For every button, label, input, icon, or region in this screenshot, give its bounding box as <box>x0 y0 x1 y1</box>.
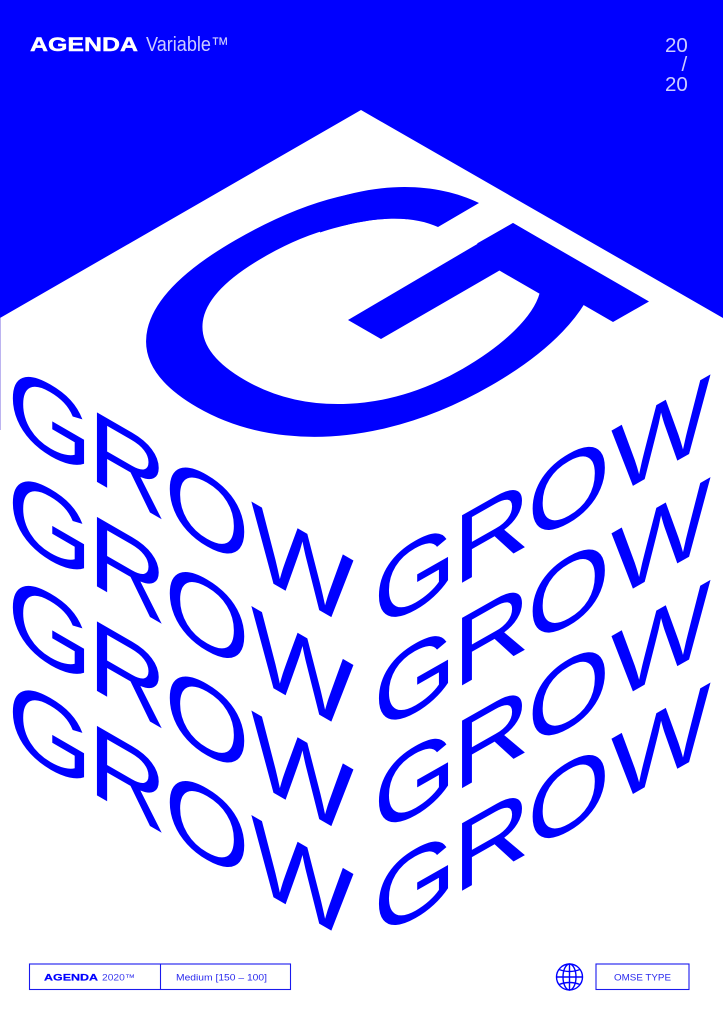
header date <box>665 34 688 96</box>
footer foundry label: OMSE TYPE <box>614 972 671 984</box>
left face: GROW repeated: GROW <box>7 653 354 966</box>
footer specimen label <box>30 964 290 990</box>
footer specimen label: 2020™ <box>102 972 135 982</box>
footer specimen label: AGENDA <box>44 972 98 984</box>
left face: GROW repeated <box>7 340 354 966</box>
right face: GROW repeated: GROW <box>374 457 711 757</box>
header date: / <box>682 53 688 76</box>
header wordmark: Variable™ <box>146 34 229 56</box>
right face: GROW repeated: GROW <box>374 559 711 859</box>
blue roof background <box>0 0 723 318</box>
left face: GROW repeated: GROW <box>7 549 354 861</box>
right face: GROW repeated <box>374 354 711 962</box>
left face: GROW repeated: GROW <box>7 340 354 652</box>
left face: GROW repeated: GROW <box>7 444 354 757</box>
footer foundry label <box>596 964 689 990</box>
footer specimen label: Medium [150 – 100] <box>176 972 267 982</box>
right face: GROW repeated: GROW <box>374 662 711 962</box>
header date: 20 <box>665 73 688 96</box>
header date: 20 <box>665 34 688 57</box>
icon: globe <box>556 964 582 990</box>
right face: GROW repeated: GROW <box>374 354 711 654</box>
header wordmark <box>30 34 229 56</box>
header wordmark: AGENDA <box>30 34 138 56</box>
